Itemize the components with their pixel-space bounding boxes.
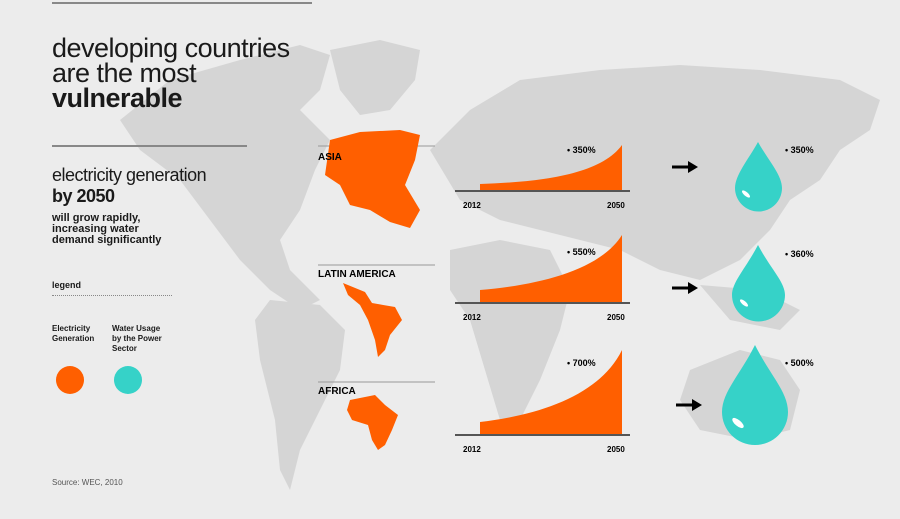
region: Africa: • 700%	[567, 358, 596, 368]
title	[52, 33, 290, 113]
legend: electricity	[52, 324, 94, 343]
water labels: • 350%	[785, 145, 814, 155]
arrows	[672, 161, 702, 411]
subtitle: by 2050	[52, 186, 115, 206]
water labels: • 360%	[785, 249, 814, 259]
region: Asia	[318, 130, 630, 228]
description: increasing water	[52, 223, 139, 235]
subtitle	[52, 165, 206, 206]
legend: electricity: Electricity	[52, 324, 90, 333]
region: Asia: • 350%	[567, 145, 596, 155]
title: developing countries	[52, 33, 290, 63]
region: Asia: 2012	[463, 201, 481, 210]
legend	[52, 280, 172, 394]
region: Africa: 2012	[463, 445, 481, 454]
description: will grow rapidly,	[52, 212, 140, 224]
water labels: • 500%	[785, 358, 814, 368]
legend: electricity: Generation	[52, 334, 94, 343]
source: Source: WEC, 2010	[52, 478, 123, 487]
legend: water: by the Power	[112, 334, 162, 343]
legend: water: Water Usage	[112, 324, 160, 333]
subtitle: electricity generation	[52, 165, 206, 185]
region: Asia: ASIA	[318, 152, 342, 163]
region: Latin America: • 550%	[567, 247, 596, 257]
legend: legend	[52, 280, 81, 290]
title: are the most	[52, 58, 196, 88]
region: Latin America: 2050	[607, 313, 625, 322]
top rule	[52, 2, 312, 4]
region: Latin America: 2012	[463, 313, 481, 322]
region: Africa	[318, 350, 630, 454]
region: Africa: AFRICA	[318, 386, 356, 397]
legend: water: Sector	[112, 344, 137, 353]
title: vulnerable	[52, 83, 182, 113]
region: Latin America	[318, 235, 630, 357]
description: demand significantly	[52, 234, 161, 246]
description	[52, 212, 162, 246]
water labels	[785, 145, 814, 368]
legend: water	[112, 324, 162, 353]
region: Asia: 2050	[607, 201, 625, 210]
water drops	[722, 142, 788, 445]
region: Latin America: LATIN AMERICA	[318, 269, 396, 280]
region: Africa: 2050	[607, 445, 625, 454]
